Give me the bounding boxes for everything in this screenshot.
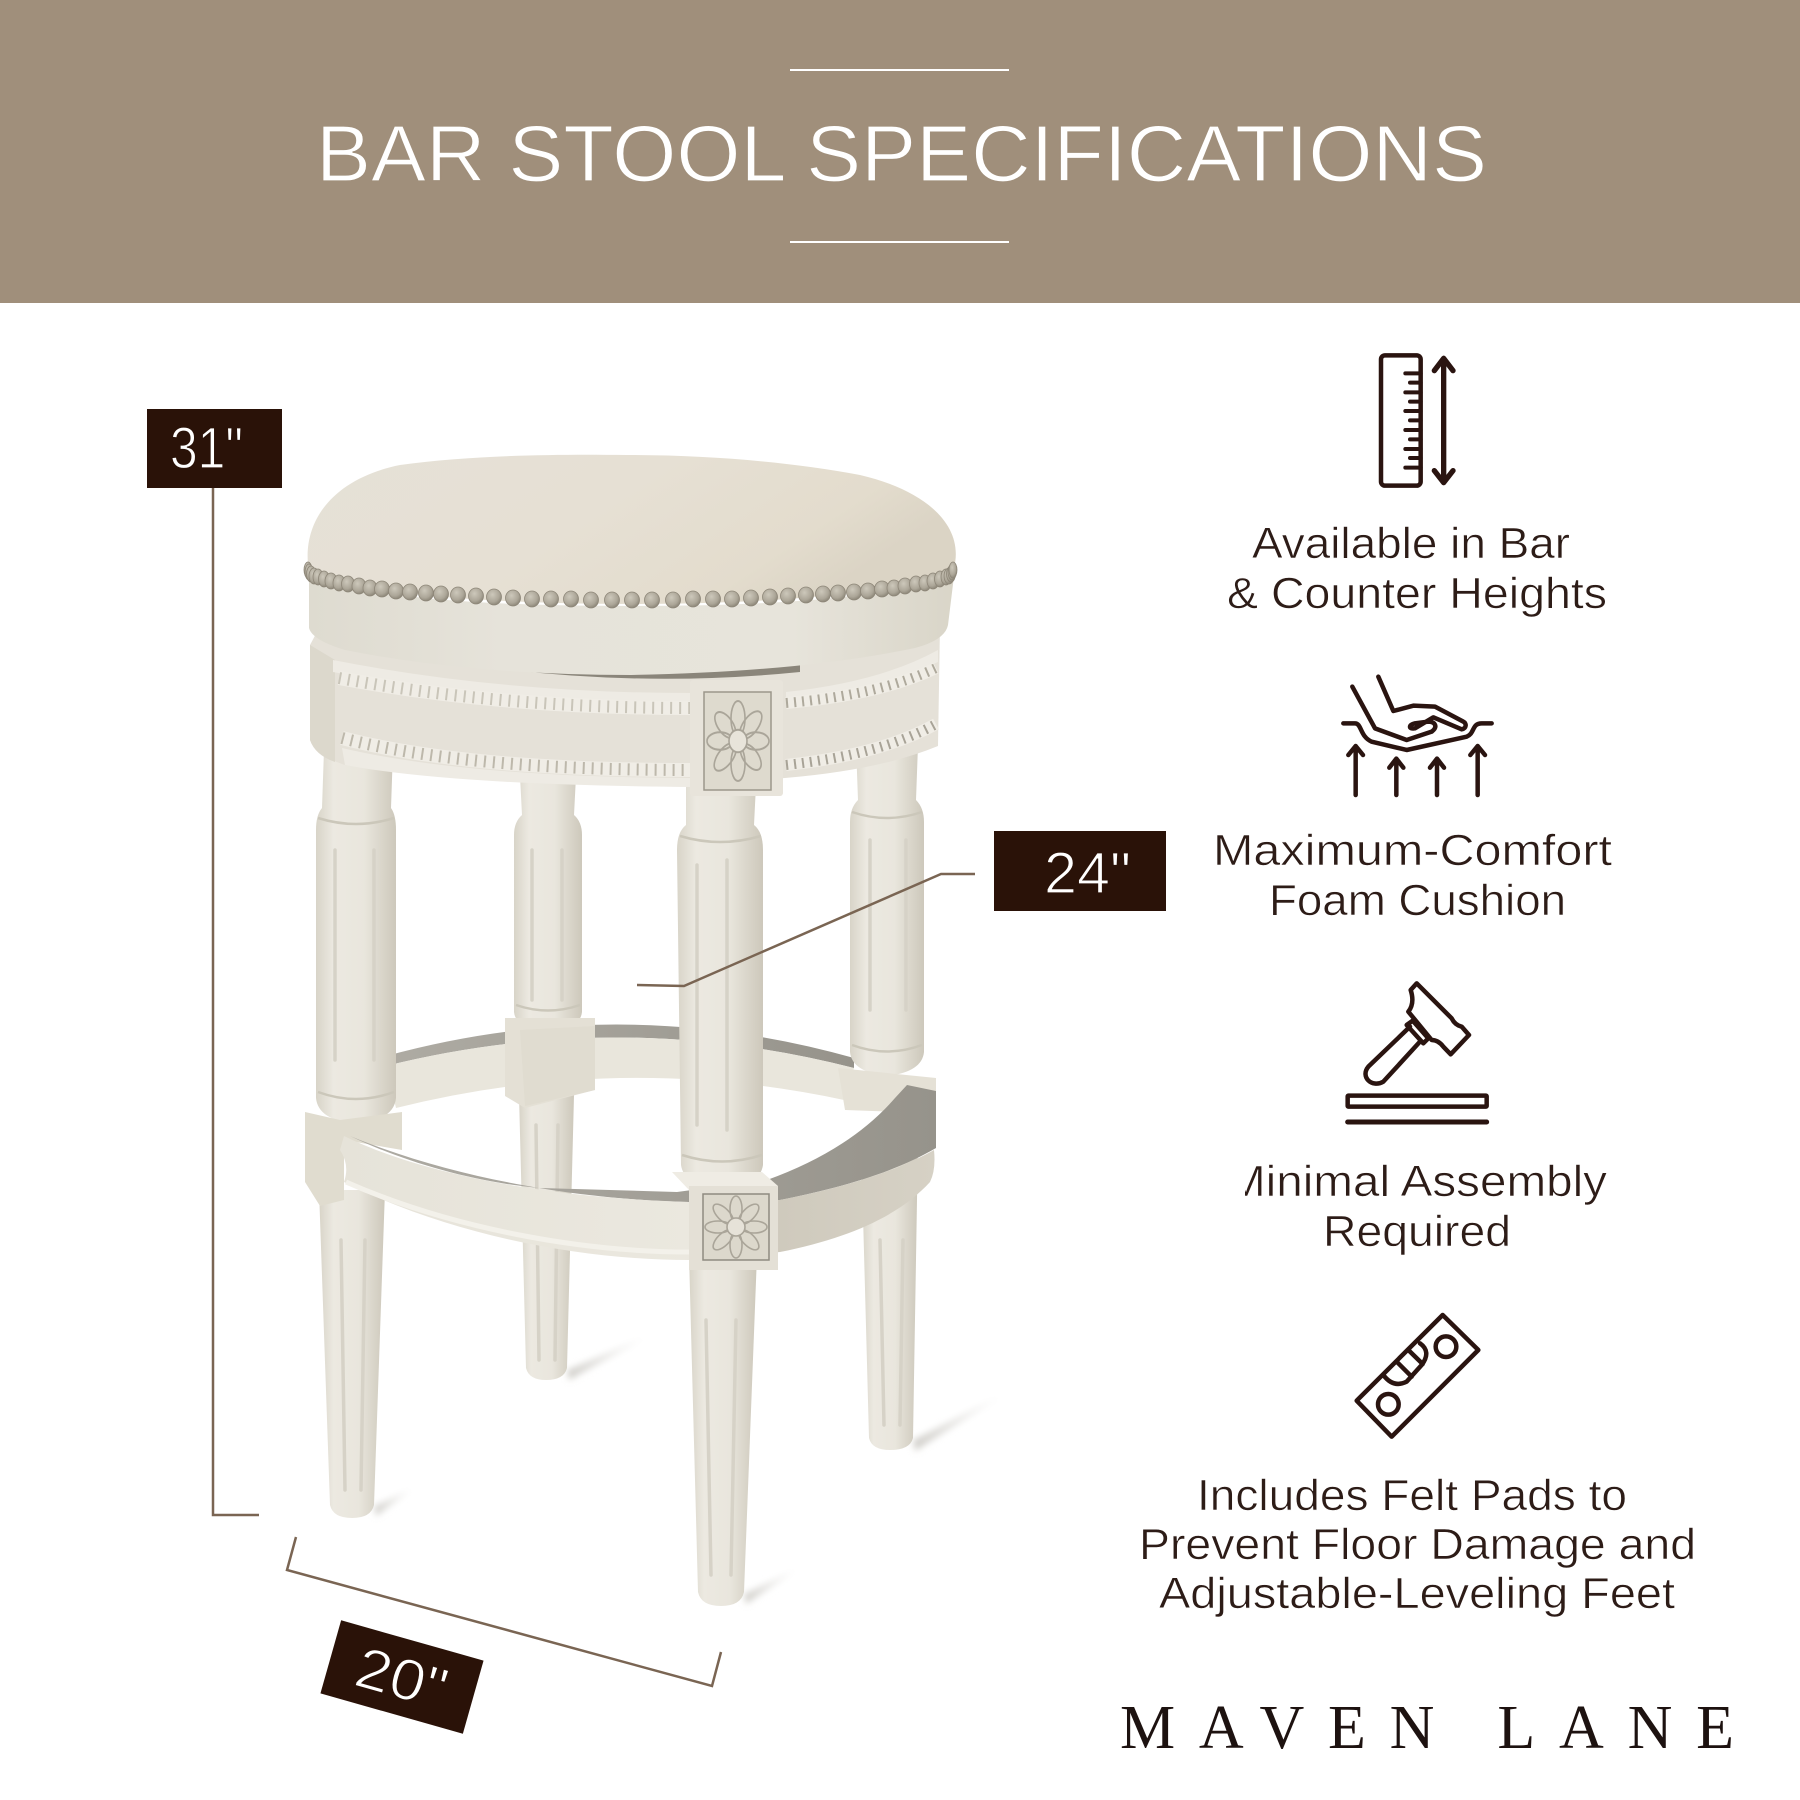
icon: spirit level [1357, 1315, 1478, 1437]
right leg [838, 745, 936, 1450]
apron ring [310, 625, 940, 787]
dimension: width 20 inches [287, 1537, 721, 1734]
bar stool illustration [304, 455, 1006, 1606]
title: BAR STOOL SPECIFICATIONS [316, 109, 1487, 198]
back footrest ring [386, 1018, 854, 1108]
icon: hammer and board [1348, 983, 1487, 1122]
feature: bar and counter heights [1227, 355, 1607, 618]
front leg [672, 785, 778, 1606]
back leg [514, 776, 582, 1380]
seat wood band [309, 568, 955, 675]
header banner [0, 0, 1800, 303]
swivel gap shadow [440, 660, 800, 679]
feature: bar and counter heights: & Counter Heights [1227, 569, 1607, 618]
floor shadows [374, 1335, 1006, 1604]
feature: minimal assembly [1226, 983, 1607, 1256]
dimension: seat height 24 inches: 24" [1044, 841, 1131, 906]
dimension: height 31 inches: 31" [170, 416, 243, 481]
brand logo: MAVEN LANE [1120, 1694, 1734, 1762]
icon: hand pressing cushion [1343, 677, 1492, 795]
feature: felt pads and leveling feet: Adjustable-Leveling Feet [1159, 1569, 1675, 1618]
caption: Minimal Assembly [1226, 1157, 1607, 1206]
feature: felt pads and leveling feet [1139, 1315, 1696, 1618]
rope mouldings [339, 668, 936, 770]
dimension: seat height 24 inches [637, 831, 1166, 986]
feature: foam cushion: Foam Cushion [1269, 876, 1566, 925]
nailhead trim [304, 562, 957, 608]
icon: ruler and arrow [1381, 355, 1453, 486]
upper block with rosette [690, 680, 783, 796]
feature: felt pads and leveling feet: Prevent Floor Damage and [1139, 1520, 1696, 1569]
dimension: height 31 inches [147, 409, 282, 1515]
front footrest ring [340, 1085, 936, 1260]
caption: Available in Bar [1252, 519, 1570, 568]
caption: Maximum-Comfort [1213, 826, 1612, 875]
left leg [305, 750, 402, 1518]
caption: Includes Felt Pads to [1197, 1471, 1627, 1520]
feature: minimal assembly: Required [1323, 1207, 1511, 1256]
feature: foam cushion [1213, 677, 1612, 925]
dimension: width 20 inches: 20" [348, 1635, 455, 1722]
front block with rosette [689, 1186, 778, 1270]
seat cushion [308, 455, 956, 604]
